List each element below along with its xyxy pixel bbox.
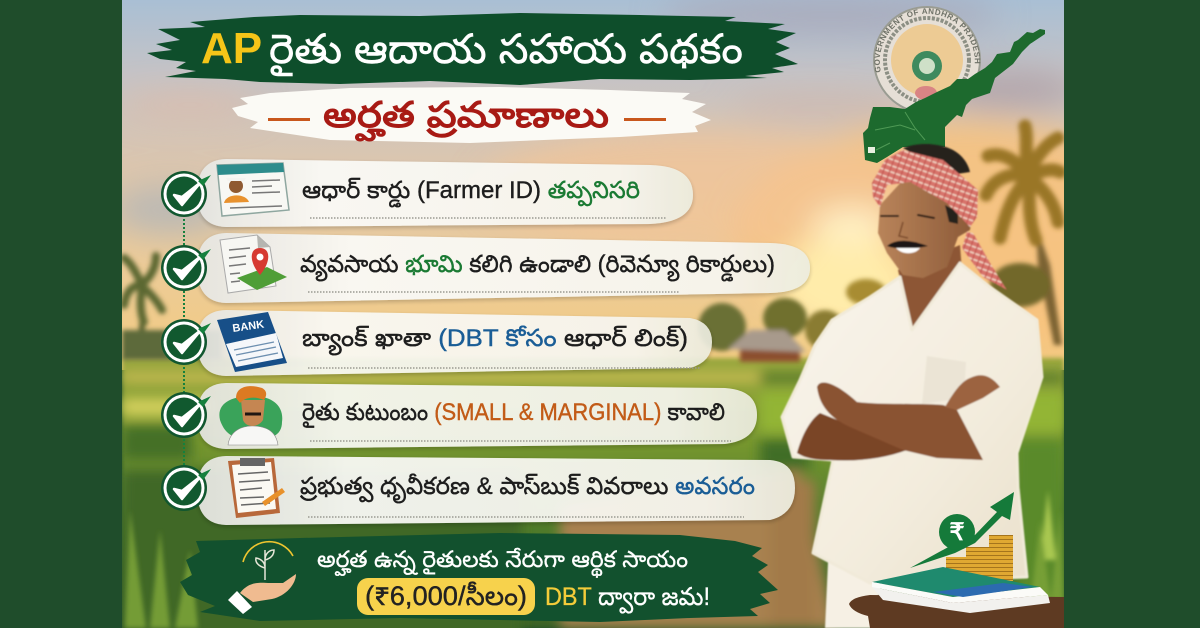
icon: hand holding plant — [228, 542, 296, 614]
main forearm and hand — [817, 382, 983, 460]
table — [849, 595, 1064, 628]
row 5 text: ప్రభుత్వ ధృవీకరణ & పాస్‌బుక్ వివరాలు అవసరం — [300, 473, 755, 504]
footer line 1: అర్హత ఉన్న రైతులకు నేరుగా ఆర్థిక సాయం — [317, 546, 688, 578]
dotted rule — [308, 367, 700, 369]
dotted rule — [310, 440, 731, 442]
title telugu text: రైతు ఆదాయ సహాయ పథకం — [269, 26, 743, 77]
row 4 text: రైతు కుటుంబం (SMALL & MARGINAL) కావాలి — [302, 399, 725, 428]
farmer illustration — [782, 144, 1042, 628]
row 2: land records — [197, 233, 810, 303]
icon: bank book: BANK — [232, 319, 265, 335]
row 1: Aadhaar card — [197, 159, 693, 227]
turban — [872, 150, 978, 227]
rupee badge: ₹ — [949, 519, 965, 546]
dotted rule — [310, 217, 667, 219]
right side band — [1064, 0, 1200, 628]
seal: Government of Andhra Pradesh: GOVERNMENT OF ANDHRA PRADESH — [874, 8, 980, 72]
amount pill: (₹6,000/సీలం) — [365, 581, 527, 611]
row 1 text: ఆధార్ కార్డు (Farmer ID) తప్పనిసరి — [302, 177, 640, 208]
moustache and smile — [887, 241, 928, 249]
hair — [903, 144, 970, 175]
dotted rule — [308, 516, 744, 518]
footer line 2: DBT ద్వారా జమ! — [545, 583, 710, 614]
shirt pocket — [922, 356, 966, 404]
AP label: AP — [201, 24, 262, 73]
background photo: sunset farm landscape — [122, 0, 1064, 628]
side hair — [945, 205, 958, 224]
left side band — [0, 0, 122, 628]
nose — [899, 222, 908, 238]
neck — [898, 245, 963, 332]
rupee badge — [939, 514, 975, 550]
eyes — [881, 215, 934, 218]
dhoti — [825, 562, 880, 628]
shirt — [782, 263, 1042, 583]
row 2 text: వ్యవసాయ భూమి కలిగి ఉండాలి (రివెన్యూ రికార్డులు) — [300, 251, 775, 282]
dotted rule — [308, 291, 680, 293]
book stack — [872, 587, 1050, 613]
icon: document with map pin — [220, 235, 287, 293]
subtitle dash right — [624, 118, 666, 121]
subtitle text: అర్హత ప్రమాణాలు — [323, 94, 609, 142]
growth arrow — [910, 492, 1014, 568]
subtitle banner — [232, 87, 711, 143]
icon: bank book — [217, 312, 287, 372]
right hand — [945, 375, 1000, 410]
row 4: farmer family — [197, 383, 757, 449]
icon: farmer avatar — [219, 386, 282, 445]
icon: ID card — [217, 163, 289, 216]
title banner — [147, 13, 798, 85]
seal: Government of Andhra Pradesh — [873, 6, 981, 109]
subtitle dash left — [268, 118, 310, 121]
row 3: bank account — [197, 310, 712, 376]
row 5: government verification — [197, 456, 795, 525]
face — [878, 178, 972, 278]
coin stacks — [946, 535, 1013, 582]
row 3 text: బ్యాంక్ ఖాతా (DBT కోసం ఆధార్ లింక్) — [302, 325, 688, 356]
check icons — [161, 171, 211, 511]
turban tail — [962, 232, 1007, 290]
book, coins and growth arrow — [849, 492, 1064, 628]
dotted connector — [183, 215, 185, 470]
icon: clipboard and pencil — [228, 458, 285, 518]
lower forearm — [797, 413, 907, 461]
map of Andhra Pradesh — [863, 29, 1045, 163]
footer banner — [180, 533, 778, 622]
